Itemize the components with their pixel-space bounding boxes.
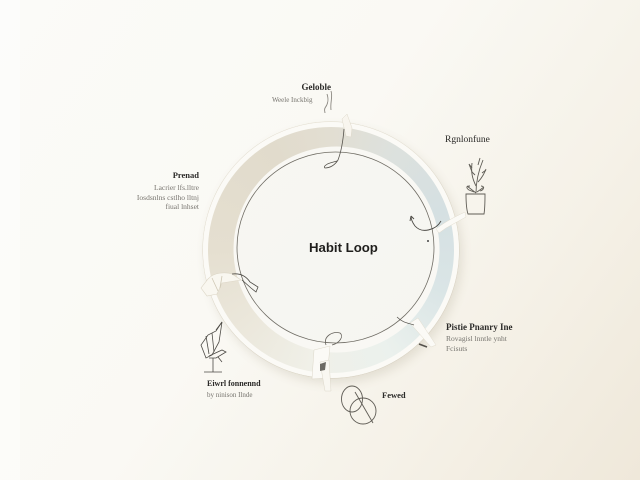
label text: top: Weele Inckbig [272, 96, 312, 104]
label: right top: Rgnlonfune [445, 135, 490, 145]
clip: left [201, 273, 258, 296]
clip: bottom [312, 333, 342, 391]
icon: two overlapping circles [342, 386, 376, 424]
label text: lower right: Rovagisl lnntle ynht [446, 334, 507, 343]
label text: environment: by ninison Ilnde [207, 391, 252, 399]
label text: lower right [446, 334, 507, 352]
label: environment [207, 379, 261, 399]
icon: potted plant [466, 158, 486, 214]
label: lower right [446, 322, 512, 352]
center title: Habit Loop [309, 240, 378, 255]
clip: right [410, 212, 466, 242]
ring: inner lip [234, 146, 440, 352]
clip: lower right [397, 317, 436, 347]
ring: inner plate and thin line [237, 152, 434, 343]
label heading: top: Geloble [302, 82, 331, 92]
label text: left: Iosdsnlns cstlho lltnj [137, 192, 199, 202]
label text: lower right: Fcisuts [446, 344, 467, 352]
label: feed: Fewed [382, 390, 406, 400]
label: left [137, 170, 199, 211]
label text: left: Lacrier lfs.lltre [154, 183, 199, 192]
ring: recessed band with white rim [203, 122, 459, 378]
label text: left: fiual lnhset [165, 202, 199, 211]
label heading: environment: Eiwrl fonnennd [207, 379, 261, 388]
icon: squiggle [325, 91, 332, 113]
clip: top [324, 114, 352, 168]
icon: chair [201, 322, 226, 372]
label text: left [137, 183, 199, 211]
page edge tint [0, 0, 20, 480]
label heading: left: Prenad [173, 170, 199, 180]
label: top [272, 82, 331, 104]
label heading: lower right: Pistie Pnanry Ine [446, 322, 512, 332]
